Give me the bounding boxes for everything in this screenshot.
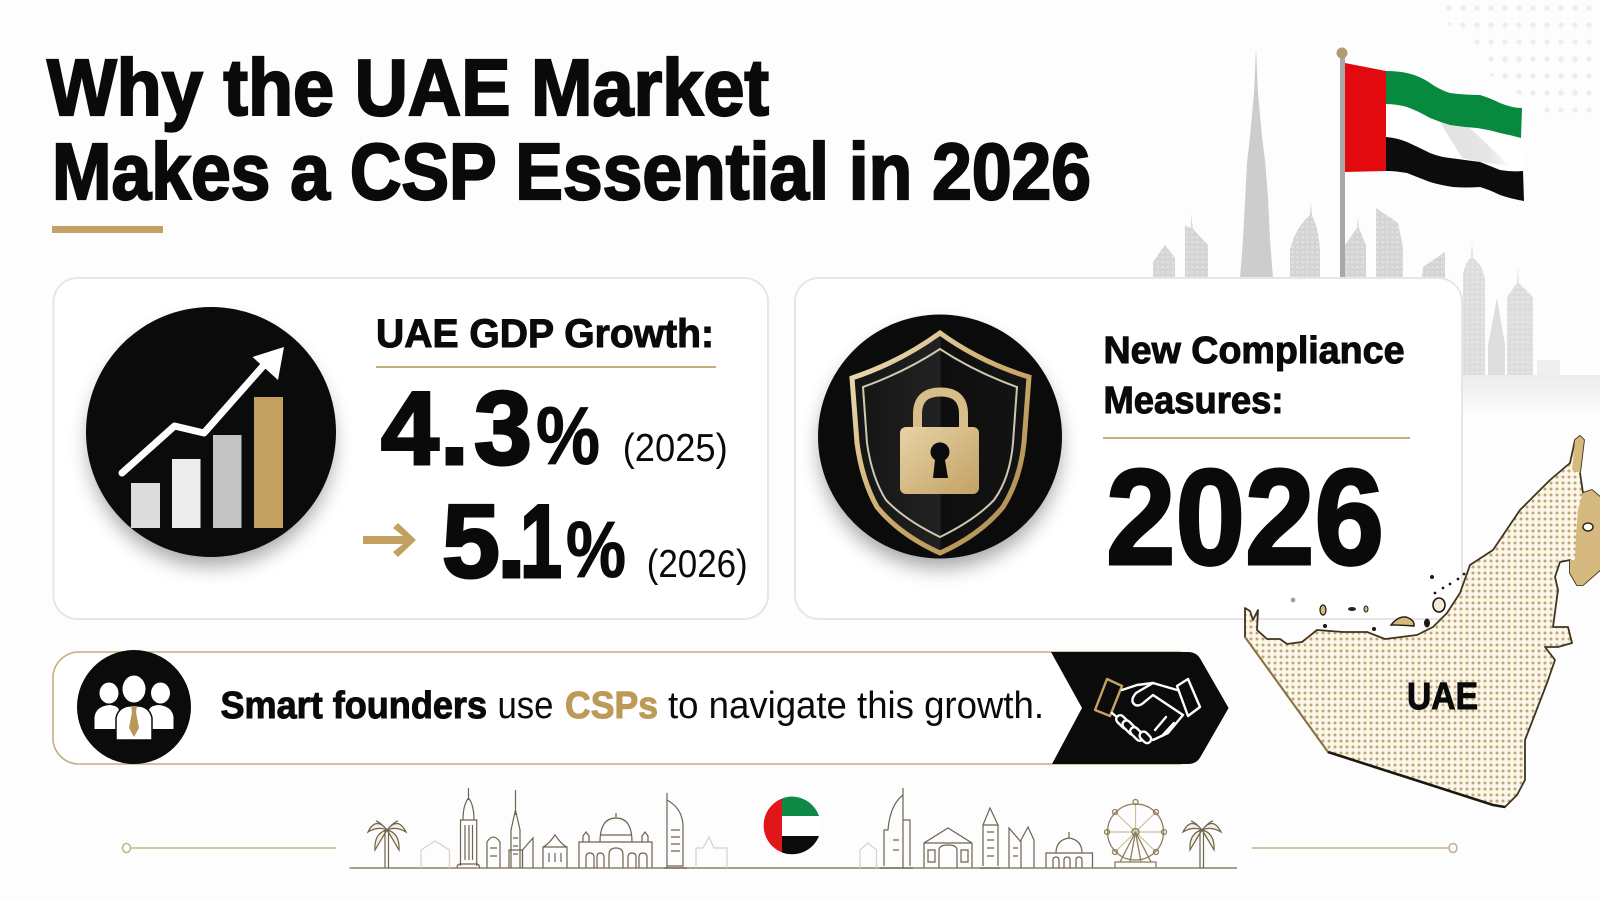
heading divider (1103, 437, 1410, 439)
panel: GDP growth (54, 278, 768, 619)
footer line right (1252, 844, 1457, 852)
title underline (52, 226, 163, 233)
heading: New Compliance Measures (1104, 330, 1404, 422)
call-to-action text: to navigate this growth. (668, 685, 1044, 727)
stat: 4.3% (381, 371, 600, 487)
stat: 5.1%: 5. (442, 484, 526, 600)
call-to-action text: use (498, 685, 554, 727)
stat: 5.1%: 1 (520, 484, 562, 600)
icon: handshake (1095, 679, 1200, 745)
islands (1291, 573, 1465, 631)
call-to-action bar (53, 650, 1229, 764)
stat: 5.1%: % (566, 505, 626, 594)
icon: shield with padlock (818, 314, 1062, 568)
arrow (363, 523, 416, 557)
stat: 4.3%: 4.3 (381, 371, 532, 487)
call-to-action text: CSPs (565, 685, 658, 727)
footer skyline left (368, 788, 727, 868)
title (47, 43, 1091, 216)
heading: New Compliance Measures: New Compliance (1104, 330, 1404, 372)
map of the UAE (1245, 436, 1600, 807)
decorative dot pattern top right (1440, 0, 1600, 115)
footer ground line (350, 867, 1237, 869)
south border line (1328, 752, 1505, 807)
call-to-action text: Smart founders (220, 685, 487, 727)
footer line left (122, 844, 336, 852)
title: Why the UAE Market (47, 43, 769, 132)
enclave (1583, 523, 1593, 531)
panel: compliance (795, 278, 1462, 619)
stat: 4.3%: % (536, 391, 600, 482)
map label: UAE (1407, 676, 1478, 718)
UAE flag (1345, 63, 1524, 201)
heading: UAE GDP Growth: UAE GDP Growth: (376, 312, 714, 356)
eastern emirates gold area (1570, 490, 1600, 585)
heading: New Compliance Measures: Measures: (1104, 380, 1284, 422)
grey Dubai skyline (1153, 48, 1600, 417)
black chevron tag (1051, 652, 1229, 764)
west border line (1245, 637, 1328, 752)
northern tip gold area (1572, 436, 1584, 473)
icon: team (77, 650, 191, 764)
stat: 5.1% (442, 484, 626, 600)
stat: 2026: 2026 (1106, 441, 1384, 593)
icon: palm (368, 821, 406, 868)
flag pole (1336, 48, 1348, 278)
footer flag badge (764, 796, 821, 854)
year: 2026: (2026) (647, 543, 748, 586)
icon: growth chart circle (86, 307, 336, 566)
year: 2025: (2025) (623, 427, 728, 470)
call-to-action text (220, 685, 1044, 727)
title: Makes a CSP Essential in 2026 (52, 127, 1091, 216)
icon: palm (1183, 821, 1221, 868)
footer skyline right (860, 788, 1221, 868)
heading divider (376, 366, 716, 368)
